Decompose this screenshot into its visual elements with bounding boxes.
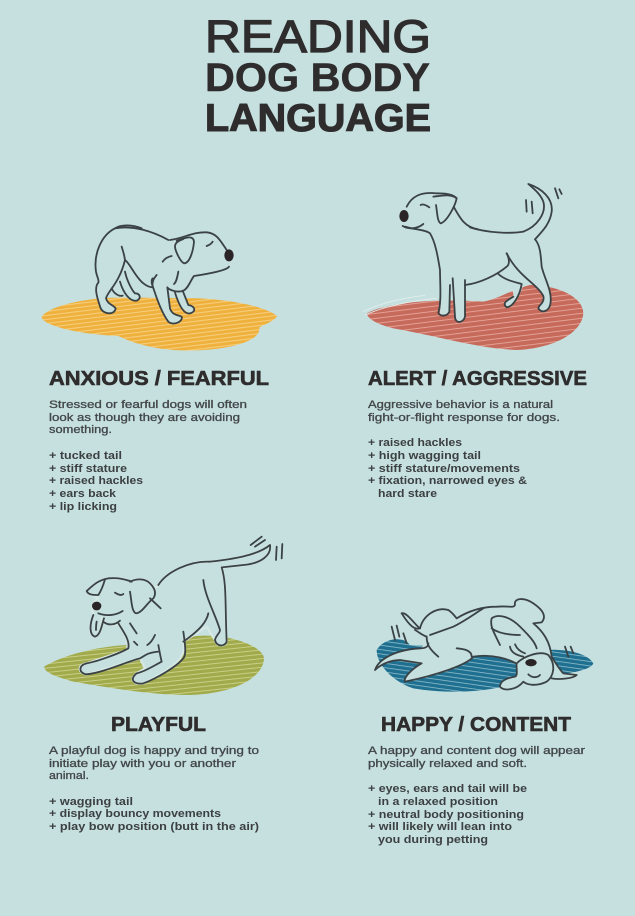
list: playful signs: + play bow position (butt in the air) bbox=[49, 821, 259, 833]
heading: anxious / fearful: ANXIOUS / FEARFUL bbox=[49, 368, 269, 390]
list: anxious signs: + stiff stature bbox=[49, 463, 127, 475]
list: alert signs: + raised hackles bbox=[368, 437, 462, 449]
yellow puddle bbox=[42, 297, 277, 350]
list: alert signs: + stiff stature/movements bbox=[368, 463, 520, 475]
icon: tail wag marks bbox=[392, 626, 573, 657]
description: alert bbox=[368, 399, 560, 424]
dog body, tucked tail and lowered head bbox=[96, 225, 234, 323]
icon: tail wag marks bbox=[526, 188, 562, 213]
panel: alert / aggressive bbox=[363, 184, 587, 500]
title: LANGUAGE bbox=[205, 97, 431, 140]
illustration: alert dog on red puddle bbox=[363, 184, 583, 350]
description: playful: A playful dog is happy and trying to bbox=[49, 745, 259, 757]
title: DOG BODY bbox=[205, 56, 430, 100]
description: happy: physically relaxed and soft. bbox=[368, 758, 527, 770]
red puddle bbox=[367, 285, 583, 350]
description: anxious: Stressed or fearful dogs will often bbox=[49, 399, 247, 411]
dog body, high tail bbox=[399, 184, 552, 322]
description: alert: Aggressive behavior is a natural bbox=[368, 399, 553, 411]
list: anxious signs: + raised hackles bbox=[49, 475, 143, 487]
dog body, lying on back bbox=[375, 599, 577, 689]
list: playful signs bbox=[49, 796, 259, 833]
list: alert signs: + high wagging tail bbox=[368, 450, 481, 462]
sketch lines above puddle bbox=[363, 295, 437, 315]
illustration: play bowing dog on green puddle bbox=[44, 537, 282, 695]
list: anxious signs bbox=[49, 450, 143, 513]
illustration: relaxed dog rolling on blue puddle bbox=[375, 599, 593, 692]
list: happy signs: + eyes, ears and tail will be bbox=[368, 783, 527, 795]
list: alert signs bbox=[368, 437, 527, 500]
description: playful: animal. bbox=[49, 770, 89, 782]
description: happy bbox=[368, 745, 585, 770]
description: playful bbox=[49, 745, 259, 782]
blue puddle bbox=[377, 639, 593, 692]
heading: playful: PLAYFUL bbox=[111, 714, 206, 736]
illustration: anxious dog on yellow puddle bbox=[42, 225, 277, 350]
description: anxious bbox=[49, 399, 247, 436]
title: READING bbox=[205, 11, 431, 62]
list: anxious signs: + lip licking bbox=[49, 501, 117, 513]
heading: happy / content: HAPPY / CONTENT bbox=[381, 714, 571, 736]
list: happy signs: + will likely will lean into bbox=[368, 821, 512, 833]
list: alert signs: hard stare bbox=[378, 488, 437, 500]
list: playful signs: + wagging tail bbox=[49, 796, 133, 808]
heading: alert / aggressive: ALERT / AGGRESSIVE bbox=[368, 368, 587, 390]
list: anxious signs: + tucked tail bbox=[49, 450, 122, 462]
description: anxious: something. bbox=[49, 424, 112, 436]
dog body, play bow bbox=[80, 545, 270, 684]
list: playful signs: + display bouncy movements bbox=[49, 808, 221, 820]
panel: anxious / fearful bbox=[42, 225, 277, 513]
list: happy signs: + neutral body positioning bbox=[368, 809, 524, 821]
list: happy signs: in a relaxed position bbox=[378, 796, 498, 808]
list: alert signs: + fixation, narrowed eyes & bbox=[368, 475, 527, 487]
description: happy: A happy and content dog will appear bbox=[368, 745, 585, 757]
description: alert: fight-or-flight response for dogs. bbox=[368, 412, 560, 424]
list: happy signs: you during petting bbox=[378, 834, 488, 846]
icon: tail wag marks bbox=[251, 537, 282, 560]
green puddle bbox=[44, 636, 264, 695]
list: happy signs bbox=[368, 783, 527, 846]
description: playful: initiate play with you or another bbox=[49, 758, 236, 770]
list: anxious signs: + ears back bbox=[49, 488, 117, 500]
panel: happy / content bbox=[368, 599, 593, 846]
panel: playful bbox=[44, 537, 282, 833]
description: anxious: look as though they are avoiding bbox=[49, 412, 240, 424]
title bbox=[205, 11, 431, 140]
